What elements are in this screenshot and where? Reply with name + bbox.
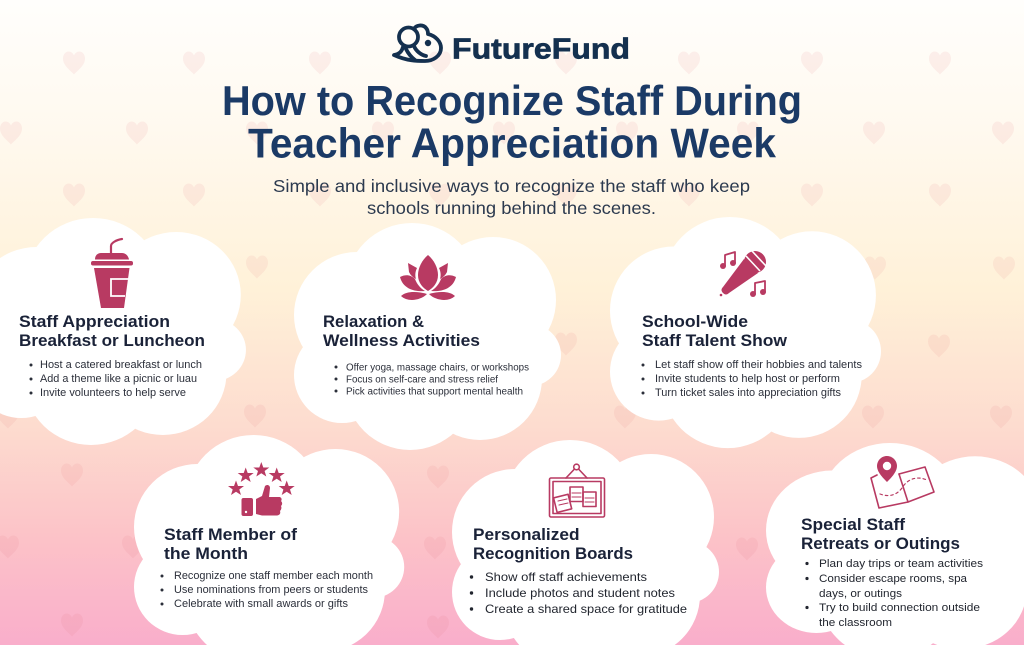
- icon: drink cup: [91, 239, 133, 308]
- bullet list: Show off staff achievements: [485, 570, 647, 584]
- icon: stars and thumbs up: [228, 462, 295, 516]
- heading: Retreats or Outings: [801, 534, 960, 553]
- cloud background: [0, 218, 246, 445]
- bullet list: Add a theme like a picnic or luau: [40, 373, 197, 385]
- bullet list: Plan day trips or team activities: [819, 558, 984, 570]
- heading: Special Staff: [801, 515, 905, 534]
- bullet list: Let staff show off their hobbies and talents: [655, 359, 862, 371]
- cloud background: [134, 435, 404, 645]
- bullet list: days, or outings: [819, 588, 903, 600]
- cloud background: [294, 223, 561, 450]
- subtitle: schools running behind the scenes.: [367, 198, 656, 218]
- subtitle: Simple and inclusive ways to recognize the staff who keep: [273, 176, 750, 196]
- bullet list: Invite volunteers to help serve: [40, 387, 186, 399]
- heading: Personalized: [473, 525, 580, 544]
- title: Teacher Appreciation Week: [248, 120, 777, 166]
- title: [222, 77, 802, 166]
- icon: microphone and notes: [720, 251, 766, 297]
- bullet list: Offer yoga, massage chairs, or workshops: [346, 362, 529, 374]
- bullet list: Include photos and student notes: [485, 586, 675, 600]
- panel: Personalized Recognition Boards: [452, 440, 719, 645]
- heading: Staff Talent Show: [642, 331, 788, 350]
- cloud background: [766, 443, 1024, 645]
- subtitle: [273, 176, 750, 218]
- bullet list: Use nominations from peers or students: [174, 584, 368, 596]
- bullet list: [642, 359, 862, 399]
- cloud background: [452, 440, 719, 645]
- bullet list: Turn ticket sales into appreciation gifts: [655, 387, 841, 399]
- icon: map and pin: [871, 456, 934, 508]
- panel: Special Staff Retreats or Outings: [766, 443, 1024, 645]
- heading: [642, 312, 788, 350]
- heading: School-Wide: [642, 312, 748, 331]
- panel: Relaxation & Wellness Activities: [294, 223, 561, 450]
- heading: Staff Appreciation: [19, 312, 170, 331]
- panel: Staff Appreciation Breakfast or Luncheon: [0, 218, 246, 445]
- icon: lotus: [400, 255, 456, 300]
- bullet list: Create a shared space for gratitude: [485, 602, 687, 616]
- heading: [19, 312, 205, 350]
- icon: recognition board: [550, 464, 604, 517]
- bullet list: Invite students to help host or perform: [655, 373, 840, 385]
- heading: Breakfast or Luncheon: [19, 331, 205, 350]
- icon: bee: [394, 25, 441, 61]
- heading: Relaxation &: [323, 312, 424, 331]
- bullet list: the classroom: [819, 617, 892, 629]
- bullet list: Try to build connection outside: [819, 602, 980, 614]
- bullet list: [334, 362, 529, 398]
- bullet list: [160, 570, 373, 610]
- heading: Staff Member of: [164, 525, 297, 544]
- bullet list: [470, 570, 687, 616]
- bullet list: Consider escape rooms, spa: [819, 573, 968, 585]
- panel: School-Wide Staff Talent Show: [610, 217, 881, 448]
- panel: Staff Member of the Month: [134, 435, 404, 645]
- bullet list: Recognize one staff member each month: [174, 570, 373, 582]
- heading: the Month: [164, 544, 248, 563]
- bullet list: [30, 359, 202, 399]
- cloud background: [610, 217, 881, 448]
- heading: [801, 515, 960, 553]
- heading: [164, 525, 297, 563]
- bullet list: Pick activities that support mental health: [346, 386, 523, 398]
- bullet list: [805, 558, 984, 629]
- heading: [473, 525, 633, 563]
- heading: Recognition Boards: [473, 544, 633, 563]
- bullet list: Celebrate with small awards or gifts: [174, 598, 348, 610]
- bullet list: Host a catered breakfast or lunch: [40, 359, 202, 371]
- logo wordmark: FutureFund: [452, 34, 630, 66]
- title: How to Recognize Staff During: [222, 77, 802, 124]
- bullet list: Focus on self-care and stress relief: [346, 374, 498, 386]
- logo: FutureFund: [394, 25, 630, 66]
- heading: Wellness Activities: [323, 331, 480, 350]
- heading: [323, 312, 480, 350]
